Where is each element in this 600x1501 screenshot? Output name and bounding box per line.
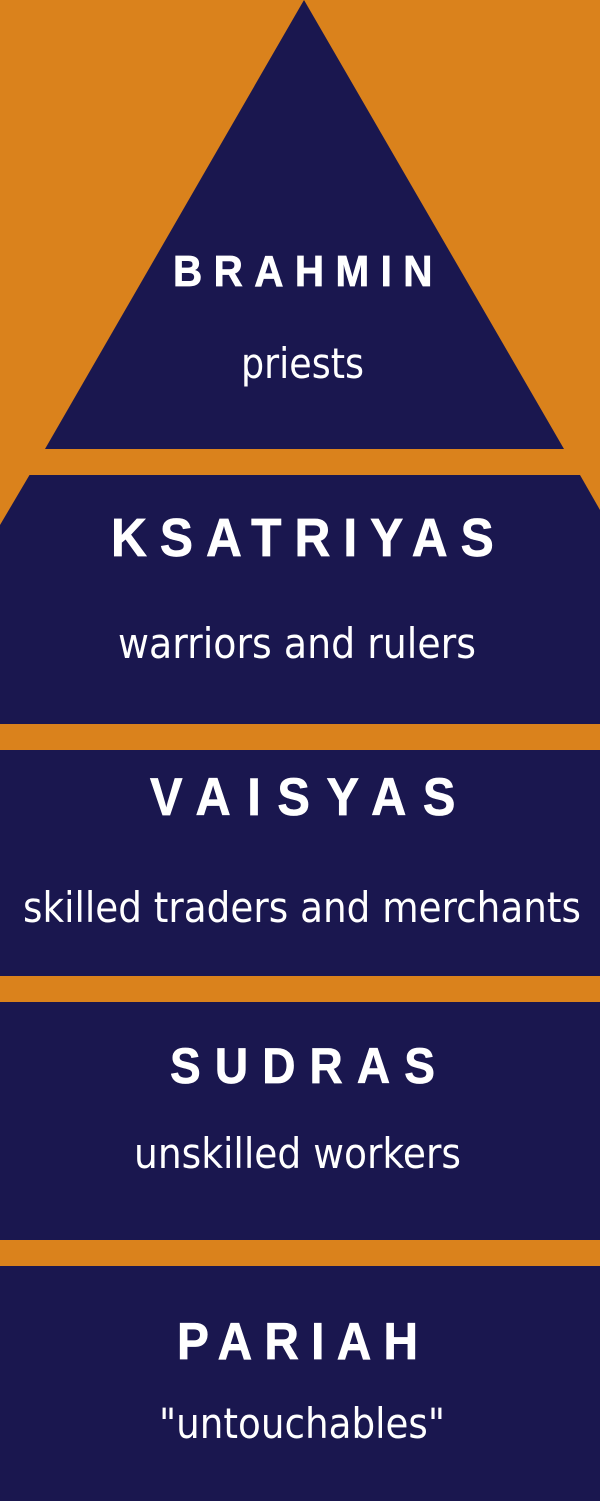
heading: KSATRIYAS: KSATRIYAS: [111, 507, 494, 567]
panel: Brahmin tier: [45, 0, 564, 449]
panel: Sudras tier: [0, 1002, 600, 1240]
panel: Vaisyas tier: [0, 750, 600, 976]
panel: Pariah tier: [0, 1266, 600, 1501]
text: warriors and rulers: warriors and rulers: [118, 619, 476, 668]
heading: PARIAH: PARIAH: [177, 1312, 418, 1370]
heading: VAISYAS: VAISYAS: [150, 767, 455, 826]
band: [0, 750, 600, 976]
panel: Ksatriyas tier: [0, 475, 600, 724]
text: unskilled workers: unskilled workers: [134, 1129, 461, 1178]
heading: SUDRAS: SUDRAS: [170, 1039, 435, 1094]
band: [0, 1266, 600, 1501]
text: "untouchables": "untouchables": [159, 1399, 445, 1448]
triangle shape: [45, 0, 564, 449]
band: [0, 1002, 600, 1240]
heading: BRAHMIN: BRAHMIN: [173, 246, 432, 295]
text: priests: priests: [241, 339, 364, 388]
trapezoid shape: [0, 475, 600, 724]
